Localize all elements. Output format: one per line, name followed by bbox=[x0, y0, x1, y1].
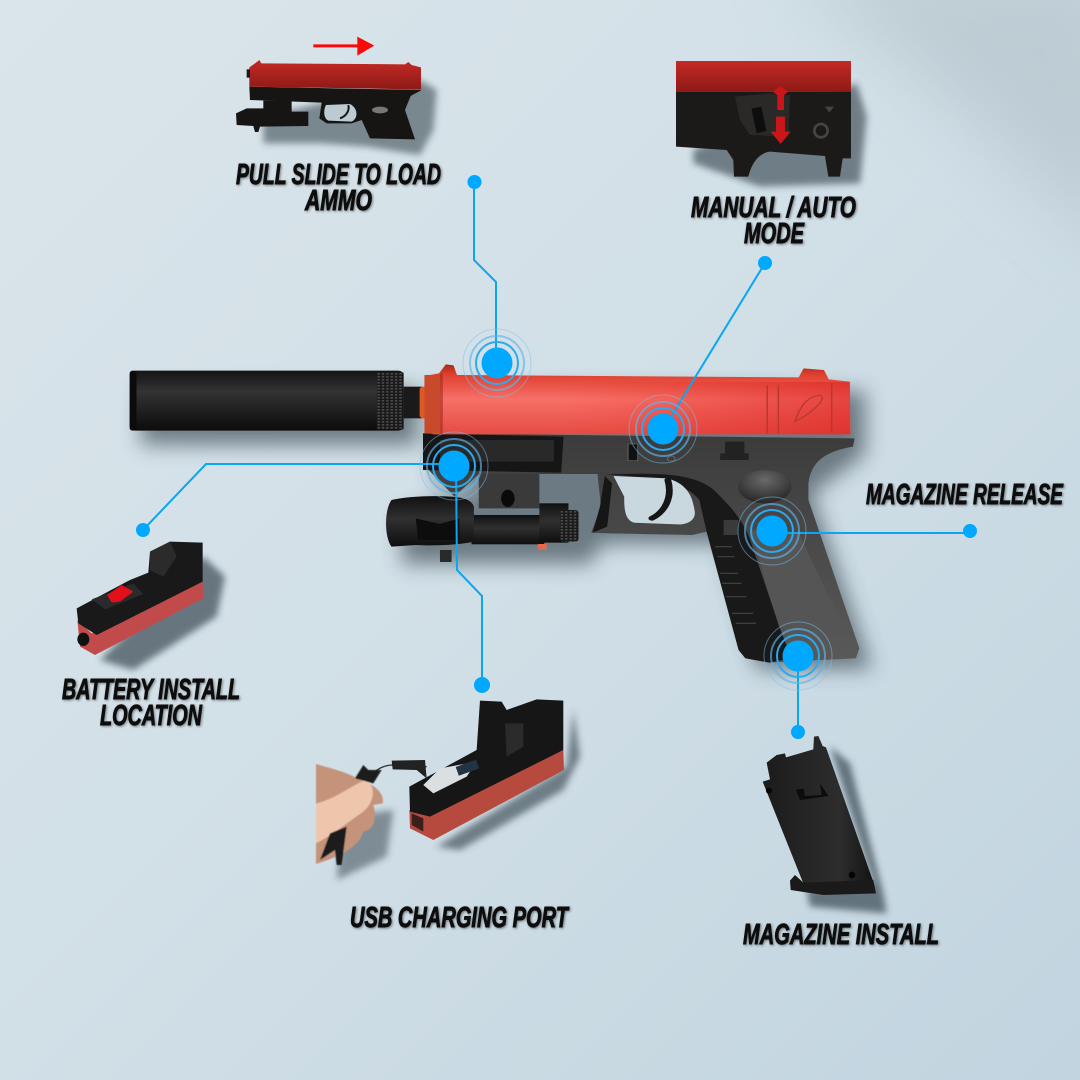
callout end dots bbox=[136, 175, 977, 739]
battery compartment bbox=[423, 762, 477, 793]
lower frame bbox=[676, 92, 851, 177]
label: battery: BATTERY INSTALL bbox=[62, 674, 240, 706]
suppressor bbox=[130, 371, 434, 431]
label: battery: LOCATION bbox=[100, 700, 203, 732]
callout lines bbox=[143, 182, 970, 732]
main blaster bbox=[130, 364, 872, 669]
red arrow bbox=[313, 37, 374, 56]
label: manual auto: MODE bbox=[744, 218, 805, 250]
hotspot: magazine bbox=[764, 622, 832, 690]
red double arrow bbox=[771, 86, 791, 144]
hotspot: battery and usb bbox=[420, 432, 488, 500]
trigger bbox=[652, 480, 669, 518]
red shell bbox=[409, 750, 564, 840]
red battery bbox=[107, 585, 133, 603]
label: magazine install: MAGAZINE INSTALL bbox=[743, 919, 939, 951]
frame bbox=[423, 433, 859, 663]
red top bbox=[676, 61, 851, 92]
label: usb: USB CHARGING PORT bbox=[350, 902, 570, 934]
inset: usb charging bbox=[316, 699, 580, 880]
inset: magazine bbox=[763, 736, 887, 913]
red slide bbox=[249, 60, 421, 89]
trigger opening bbox=[324, 104, 356, 122]
trigger guard opening bbox=[614, 476, 695, 524]
label: battery bbox=[62, 674, 240, 732]
gun body in zoom coordinates bbox=[130, 364, 859, 663]
label: manual auto: MANUAL / AUTO bbox=[691, 192, 856, 224]
label: pull slide: PULL SLIDE TO LOAD bbox=[236, 159, 441, 191]
lower red shell bbox=[77, 582, 203, 655]
label: manual auto bbox=[691, 192, 856, 250]
hotspot: magazine release bbox=[738, 497, 806, 565]
flashlight bbox=[386, 474, 579, 562]
slide frame bbox=[249, 87, 422, 139]
flashlight small bbox=[236, 101, 308, 132]
magazine body bbox=[763, 736, 873, 885]
inset: pull slide bbox=[236, 37, 437, 155]
hand bbox=[316, 764, 383, 865]
base plate bbox=[790, 875, 876, 895]
inset: manual auto bbox=[676, 61, 867, 187]
black shell bbox=[409, 699, 563, 817]
black body bbox=[77, 542, 203, 635]
label: pull slide: AMMO bbox=[304, 185, 372, 217]
label: pull slide bbox=[236, 159, 441, 217]
hotspot: mode switch bbox=[629, 395, 697, 463]
slide bbox=[424, 364, 851, 434]
gun shadow bbox=[141, 389, 872, 669]
inset: battery bbox=[77, 542, 225, 670]
cable bbox=[373, 765, 427, 773]
hotspot: slide bbox=[463, 329, 531, 397]
